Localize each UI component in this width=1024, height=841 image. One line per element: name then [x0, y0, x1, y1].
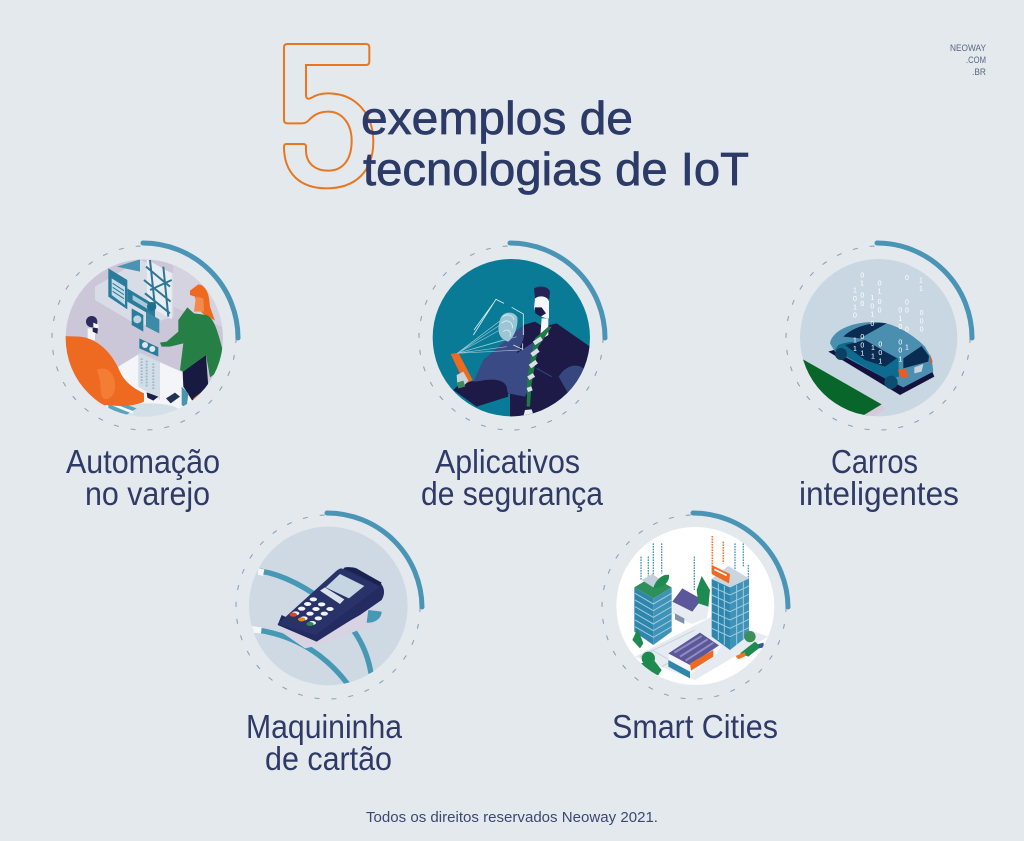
binary digits: 0 [853, 296, 857, 303]
illustration: card terminal [245, 523, 412, 687]
progress ring [419, 243, 605, 430]
panel: carros inteligentes [786, 243, 972, 512]
label: inteligentes [799, 475, 959, 512]
binary digits: 0 [878, 280, 882, 287]
binary digits: 1 [860, 280, 864, 287]
label [799, 443, 959, 512]
binary digits: 0 [905, 300, 909, 307]
binary digits: 0 [898, 340, 902, 347]
binary digits: 0 [920, 327, 924, 334]
label: de segurança [421, 475, 604, 512]
panel: maquininha de cartão [236, 513, 422, 777]
illustration: people with holographic screens [66, 259, 223, 416]
binary digits: 0 [905, 308, 909, 315]
binary digits: 1 [870, 312, 874, 319]
label [246, 708, 403, 777]
illustration: face recognition on phone [430, 257, 597, 420]
binary digits: 0 [898, 308, 902, 315]
brand text: .COM [966, 55, 986, 65]
binary digits: 0 [860, 342, 864, 349]
footer text: Todos os direitos reservados Neoway 2021. [366, 809, 658, 826]
label [66, 443, 220, 512]
binary digits: 0 [853, 313, 857, 320]
progress ring [236, 513, 422, 699]
binary digits: 1 [878, 358, 882, 365]
binary digits: 1 [898, 356, 902, 363]
binary digits: 1 [919, 278, 923, 285]
binary digits: 1 [853, 304, 857, 311]
binary digits: 1 [871, 354, 875, 361]
label: de cartão [265, 740, 392, 777]
binary digits: 0 [920, 318, 924, 325]
label: Maquininha [246, 708, 403, 745]
binary digits: 1 [853, 288, 857, 295]
binary digits: 0 [898, 324, 902, 331]
progress ring [786, 243, 972, 430]
binary digits: 0 [870, 321, 874, 328]
label: Automação [66, 443, 220, 480]
panel: automação no varejo [52, 243, 238, 512]
title: exemplos de [361, 92, 633, 144]
binary digits: 0 [920, 310, 924, 317]
binary digits: 1 [898, 316, 902, 323]
binary digits: 0 [860, 301, 864, 308]
brand text: NEOWAY [950, 43, 986, 53]
binary digits: 0 [878, 299, 882, 306]
binary digits: 1 [878, 288, 882, 295]
binary digits: 1 [871, 345, 875, 352]
binary digits [853, 273, 924, 365]
label: Aplicativos [435, 443, 580, 480]
binary digits: 0 [878, 350, 882, 357]
binary digits: 0 [905, 275, 909, 282]
panel: aplicativos de segurança [419, 243, 605, 512]
binary digits: 0 [878, 342, 882, 349]
brand text [950, 43, 986, 77]
binary digits: 1 [870, 295, 874, 302]
title: tecnologias de IoT [363, 143, 749, 195]
label: Smart Cities [612, 708, 778, 745]
binary digits: 0 [898, 348, 902, 355]
binary digits: 0 [905, 327, 909, 334]
title [361, 92, 749, 195]
illustration: connected car [795, 257, 962, 420]
binary digits: 1 [919, 286, 923, 293]
numeral 5 outline [284, 44, 373, 188]
binary digits: 1 [860, 350, 864, 357]
binary digits: 1 [853, 338, 857, 345]
illustration: smart city [616, 527, 774, 685]
binary digits: 0 [878, 308, 882, 315]
binary digits: 0 [860, 273, 864, 280]
binary digits: 0 [860, 293, 864, 300]
binary digits: 1 [853, 346, 857, 353]
brand text: .BR [972, 67, 986, 77]
label: Carros [831, 443, 918, 480]
binary digits: 0 [860, 334, 864, 341]
binary digits: 1 [905, 344, 909, 351]
label [421, 443, 604, 512]
progress ring [602, 513, 788, 699]
label: no varejo [85, 475, 210, 512]
progress ring [52, 243, 238, 430]
panel: smart cities [602, 513, 788, 745]
binary digits: 0 [870, 304, 874, 311]
